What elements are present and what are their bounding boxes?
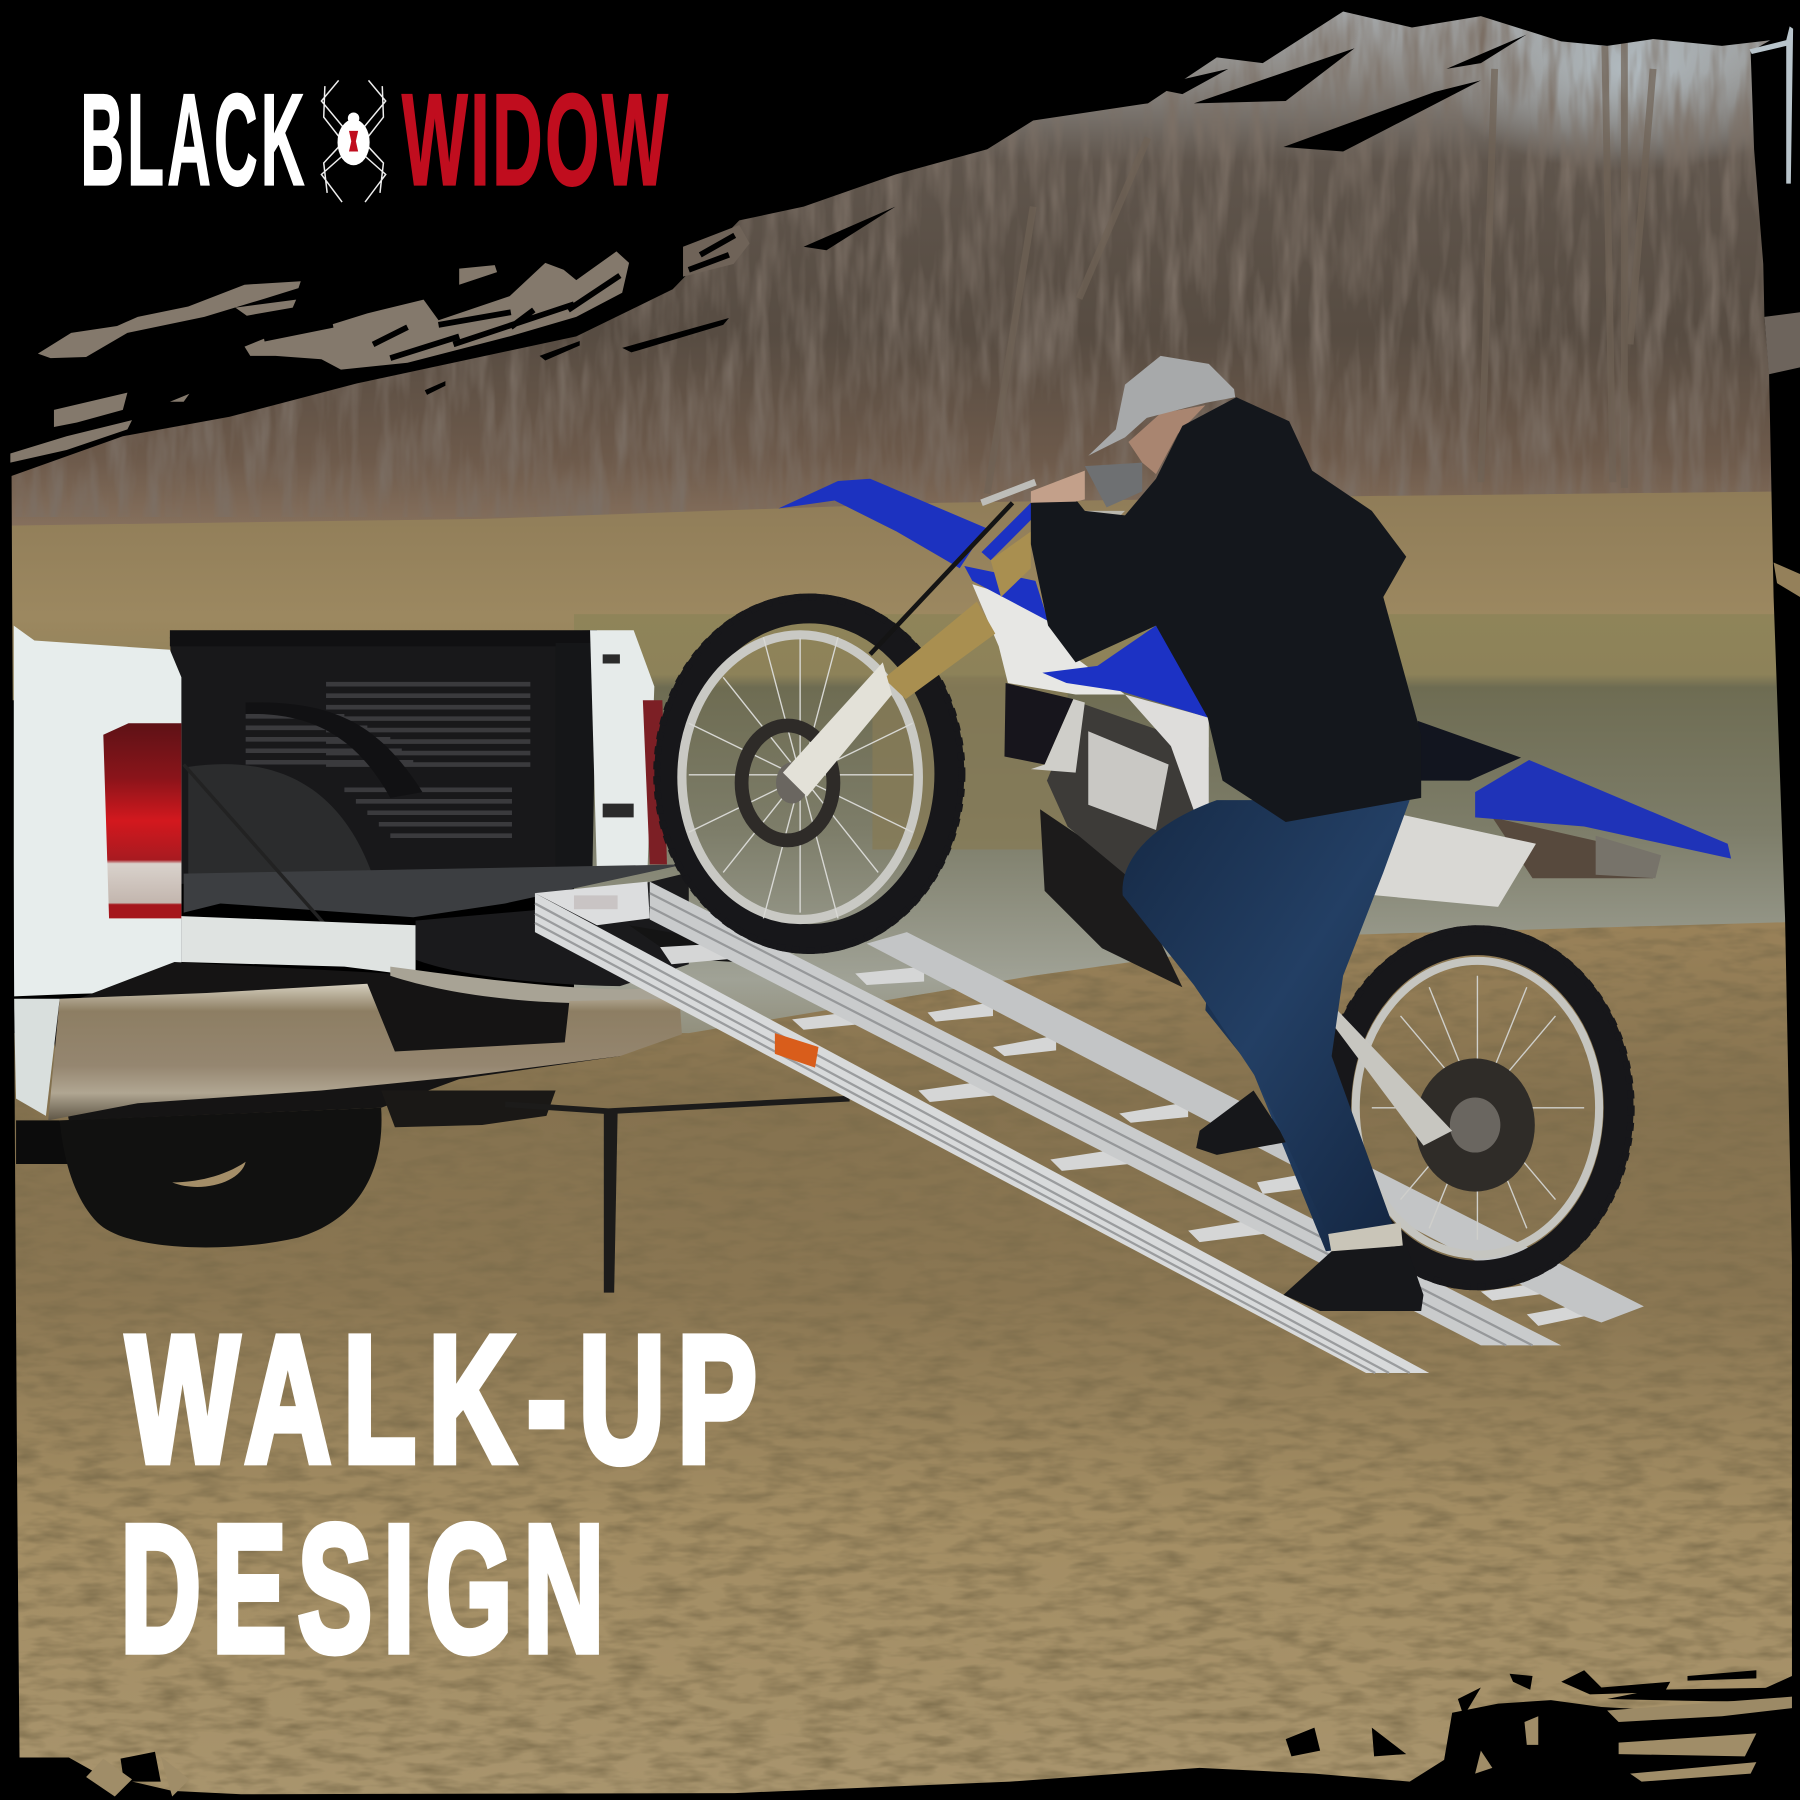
rungs bbox=[660, 941, 1593, 1326]
right edge bbox=[1710, 23, 1800, 1800]
truck tire bbox=[60, 1108, 382, 1247]
bed wall ribs bbox=[246, 684, 530, 836]
ramp brand plate bbox=[574, 895, 618, 909]
strap bbox=[505, 1099, 849, 1111]
truck underbody bbox=[16, 1120, 69, 1164]
front wheel bbox=[657, 597, 962, 951]
background: pond water bbox=[574, 614, 1800, 1045]
shadow under ramp head bbox=[629, 925, 735, 962]
bottom grunge flecks bbox=[121, 1670, 1785, 1782]
warning label bbox=[775, 1033, 818, 1068]
head plate bbox=[535, 882, 650, 925]
rear step bbox=[416, 872, 689, 986]
frame bbox=[1125, 695, 1209, 810]
rear wheel bbox=[1324, 929, 1631, 1287]
engine block bbox=[1047, 703, 1209, 884]
centre rail bbox=[650, 882, 1561, 1345]
headline bbox=[121, 1299, 769, 1690]
red reflector bbox=[643, 700, 667, 864]
far rail bbox=[867, 932, 1644, 1322]
tail light bbox=[103, 723, 181, 918]
left edge bbox=[0, 459, 20, 1800]
side panel bbox=[1352, 808, 1536, 907]
bottom edge bbox=[0, 1700, 1792, 1800]
rider bbox=[1031, 356, 1423, 1311]
blue tank strip bbox=[964, 566, 1048, 621]
motorcycle front fork bbox=[783, 482, 1035, 797]
top brush stroke bbox=[0, 0, 1800, 478]
pickup truck bbox=[14, 626, 849, 1293]
near rail bbox=[535, 893, 1429, 1373]
fork crown bbox=[1085, 511, 1125, 545]
blue radiator scoop bbox=[1042, 626, 1208, 717]
cap bbox=[1088, 356, 1235, 456]
dark post bbox=[556, 643, 592, 870]
background: far grass bank bbox=[0, 491, 1800, 700]
exhaust bbox=[1492, 817, 1659, 878]
foreground grass field bbox=[0, 922, 1800, 1800]
rear fender bbox=[1475, 760, 1731, 859]
lowered tailgate strip bbox=[181, 916, 416, 976]
hitch bbox=[381, 1091, 556, 1127]
motorcycle body bbox=[778, 479, 1731, 1146]
jacket bbox=[1031, 397, 1421, 822]
number plate bbox=[1004, 683, 1073, 765]
rear leg bbox=[1205, 895, 1372, 1251]
bank reflection in the water bbox=[872, 677, 1068, 849]
white radiator shroud bbox=[972, 584, 1125, 695]
hand bbox=[1031, 471, 1085, 503]
black brush streaks over trees bbox=[425, 34, 1527, 395]
logo word: WIDOW: WIDOW bbox=[402, 67, 670, 213]
open tailgate side post bbox=[590, 630, 654, 874]
grass texture bbox=[0, 918, 1800, 1800]
headline line 1: WALK-UP bbox=[126, 1299, 769, 1500]
swingarm bbox=[1318, 1004, 1452, 1146]
background: treeline and sky bbox=[0, 0, 1800, 540]
handlebar assembly bbox=[1085, 463, 1142, 507]
logo: BLACK bbox=[80, 67, 308, 213]
shadow under truck bbox=[48, 962, 677, 1120]
truck white body side bbox=[14, 626, 181, 996]
aluminum walk-up ramp bbox=[535, 882, 1644, 1373]
shoes bbox=[1196, 1091, 1423, 1311]
cuff bbox=[1328, 1223, 1403, 1254]
raised leg bbox=[1122, 800, 1410, 1238]
lower engine bbox=[1040, 809, 1182, 987]
bed floor bbox=[184, 864, 684, 917]
front fender bbox=[778, 479, 986, 568]
blue upper fork guard bbox=[982, 503, 1035, 560]
black slashes inside photo streaks bbox=[264, 235, 735, 358]
chrome bumper bbox=[48, 984, 682, 1120]
bed interior bbox=[170, 630, 597, 884]
wheel well bbox=[188, 764, 372, 874]
face bbox=[1128, 405, 1205, 474]
seat bbox=[1418, 721, 1521, 781]
icon: spider bbox=[321, 80, 386, 202]
cable bbox=[184, 765, 349, 952]
headline line 2: DESIGN bbox=[121, 1489, 615, 1690]
